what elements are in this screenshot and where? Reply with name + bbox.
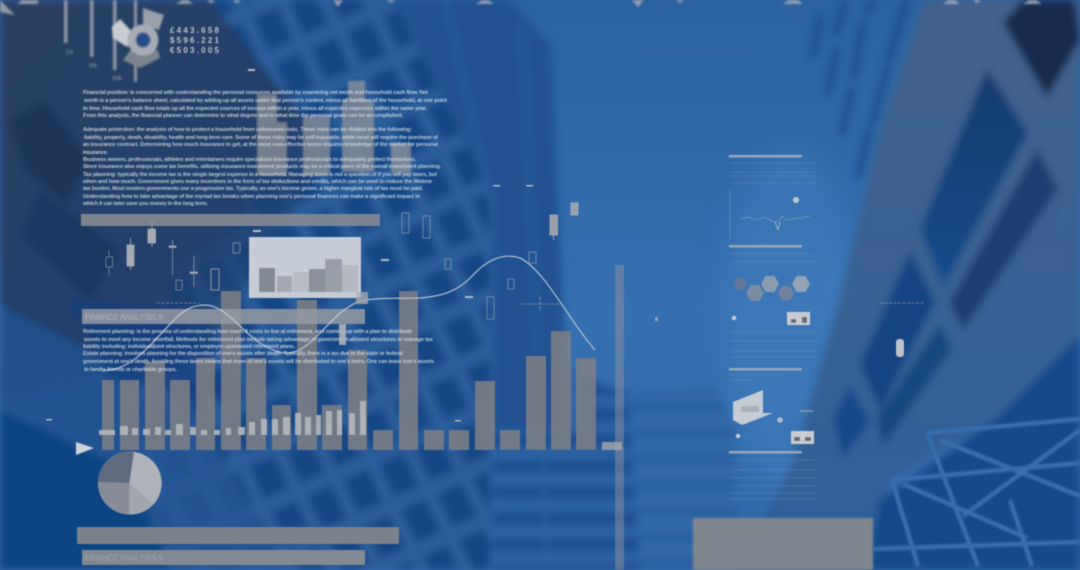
currency readout: $596.221 (170, 36, 220, 45)
finance analysis 9 label band (82, 550, 365, 565)
small icon pair (732, 312, 810, 325)
body text block: financial position: tax burden. Most modern governments use a progressive tax. Typically, as one's income grows, a higher marginal rate of tax must be paid. (83, 186, 423, 192)
vertical gauge bars: 3.4 (66, 50, 73, 56)
grey lower panel (693, 518, 873, 570)
body text block: financial position: Tax planning: typically the income tax is the single largest expense in a household. Managing taxes is not a question of if you will pay taxes, but (83, 172, 437, 178)
body text block: financial position: Business owners, professionals, athletes and entertainers require specialized insurance professionals to adequately protect themselves. (83, 157, 416, 163)
body text block: retirement planning: liability including: individual/joint structures, or employer-sponsored retirement plans. (83, 344, 295, 350)
vertical gauge bars: JUN (112, 76, 122, 82)
candlesticks (46, 69, 578, 422)
body text block: financial position: Adequate protection: the analysis of how to protect a household from unforeseen risks. These risks can be divided into the following: (83, 127, 412, 133)
mini line chart (730, 190, 810, 238)
body text block: financial position: when and how much. Government gives many incentives in the form of tax deductions and credits, which can be used to reduce the lifetime (82, 179, 432, 185)
body text block: financial position: From this analysis, the financial planner can determine to what degree and in what time the personal goals can be accomplished. (83, 113, 403, 119)
body text block: financial position: an insurance contract. Determining how much insurance to get, at the most cost-effective terms requires knowledge of the market for personal (83, 142, 438, 148)
currency readout: €503.005 (170, 46, 220, 55)
body text block: retirement planning (83, 329, 434, 373)
second small icon pair (736, 431, 814, 444)
floating bar chart panel (249, 237, 361, 298)
right column headers (729, 155, 802, 454)
body text block: financial position: Since insurance also enjoys some tax benefits, utilizing insurance investment products may be a critical piece of the overall investment planning. (83, 164, 441, 170)
finance analysis label band (82, 309, 365, 324)
right column panel (729, 155, 820, 499)
body text block: financial position: in time. Household cash flow totals up all the expected sources of income within a year, minus all expected expenses within the same year. (83, 106, 427, 112)
line curve (103, 256, 595, 370)
chart peak marker (793, 197, 799, 203)
top edge ticks (0, 0, 1042, 15)
body text block: financial position: insurance. (83, 150, 108, 156)
header band (81, 214, 380, 226)
body text block: retirement planning: to family, friends or charitable groups. (84, 367, 177, 373)
connector block on curve (339, 324, 346, 345)
small dot marker (655, 317, 658, 321)
body text block: financial position (82, 90, 447, 207)
small foreground bars (99, 401, 366, 435)
body text block: financial position: which it can later save you money in the long term. (82, 201, 208, 207)
vertical pole scale (602, 265, 624, 570)
body text block: retirement planning: Estate planning: involves planning for the disposition of one's assets after death. Typically, there is a tax due to the state or federal (83, 351, 403, 357)
far-right small marker (896, 339, 904, 357)
vertical gauge bars: JUL (89, 63, 98, 69)
body text block: retirement planning: government at one's death. Avoiding these taxes means that more of one's assets will be distributed to one's heirs. One can leave one's assets (83, 359, 434, 365)
small box on curve (356, 292, 368, 304)
lower band (77, 527, 399, 544)
laptop icon (733, 390, 813, 425)
body text block: financial position: liability, property, death, disability, health and long-term care. Some of these risks may be self-insurable, while most will require the purchase of (84, 135, 438, 141)
body text block: financial position: Understanding how to take advantage of the myriad tax breaks when planning one's personal finances can make a significant impact in (83, 194, 421, 200)
right column text lines (730, 163, 820, 499)
background bar chart, top (257, 81, 411, 175)
fan chart icon (112, 8, 164, 68)
body text block: retirement planning: assets to meet any income shortfall. Methods for retirement plan include taking advantage of government-allowed structures to manage tax (84, 337, 434, 343)
finance analysis 9 label band: FINANCE ANALYSIS 9 (85, 554, 164, 562)
currency readout (170, 26, 220, 55)
currency readout: £443.658 (170, 26, 220, 35)
vertical gauge bars (64, 0, 137, 82)
play arrow (76, 442, 94, 455)
body text block: financial position: worth is a person's balance sheet, calculated by adding up all assets under that person's control, minus all liabilities of the household, at one point (83, 98, 447, 104)
crosshair marks (157, 297, 925, 311)
pie chart (98, 452, 162, 515)
hexagons (733, 276, 810, 301)
body text block: retirement planning: Retirement planning: is the process of understanding how much it costs to live at retirement, and coming up with a plan to distribute (83, 329, 412, 335)
finance analysis label band: FINANCE ANALYSIS 8 (85, 313, 164, 322)
main bar chart (102, 291, 596, 450)
body text block: financial position: Financial position: is concerned with understanding the personal resources available by examining net worth and household cash flow. Net (83, 90, 428, 96)
